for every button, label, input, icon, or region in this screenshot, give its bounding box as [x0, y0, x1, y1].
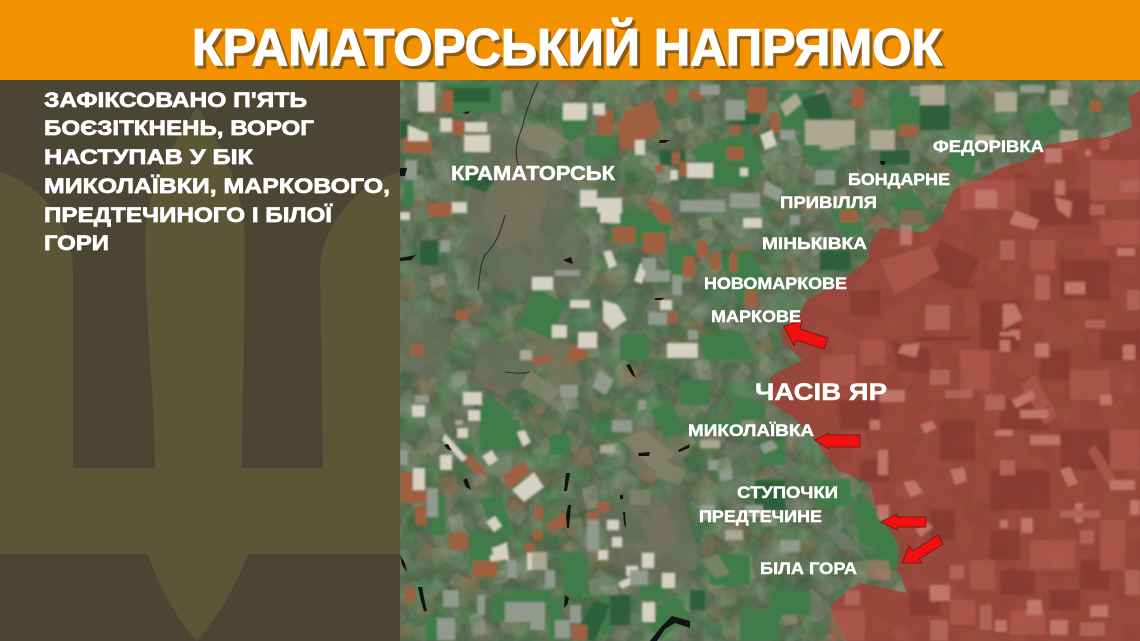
text block: summary [44, 89, 390, 255]
map: occupied territory red zone [770, 90, 1140, 641]
map label: Predtechyne: ПРЕДТЕЧИНЕ [699, 507, 822, 526]
text block: summary: ПРЕДТЕЧИНОГО І БІЛОЇ [44, 204, 333, 227]
icon: trident watermark [0, 107, 400, 641]
map: rivers and water bodies [400, 82, 886, 641]
panel: left text panel [0, 80, 400, 641]
arrow: towards Bila Hora [902, 535, 943, 563]
title: КРАМАТОРСЬКИЙ НАПРЯМОК [195, 21, 945, 80]
map label: Novomarkove: НОВОМАРКОВЕ [704, 274, 847, 293]
text block: summary: МИКОЛАЇВКИ, МАРКОВОГО, [44, 175, 390, 198]
map label: Stupochky: СТУПОЧКИ [737, 483, 838, 502]
map label: Fedorivka: ФЕДОРІВКА [933, 137, 1044, 156]
text block: summary: ЗАФІКСОВАНО П'ЯТЬ [44, 89, 307, 112]
map: red zone fields [820, 148, 1140, 641]
map label: Chasiv Yar: ЧАСІВ ЯР [755, 379, 887, 406]
map label: Minkivka: МІНЬКІВКА [762, 234, 867, 253]
map label: Mykolaivka: МИКОЛАЇВКА [688, 421, 814, 440]
panel: satellite map [400, 80, 1140, 641]
map label: Kramatorsk: КРАМАТОРСЬК [451, 163, 616, 185]
map: remaining green pocket by the front line [826, 492, 899, 567]
arrow: towards Mykolaivka [815, 433, 860, 449]
map label: Markove: МАРКОВЕ [711, 307, 801, 326]
map: dense field texture [400, 80, 1140, 641]
text block: summary: НАСТУПАВ У БІК [44, 146, 253, 169]
map label: Pryvillia: ПРИВІЛЛЯ [780, 193, 877, 212]
text block: summary: БОЄЗІТКНЕНЬ, ВОРОГ [44, 117, 314, 140]
map label: Bila Hora: БІЛА ГОРА [760, 559, 857, 578]
map: satellite field mosaic [400, 82, 1110, 641]
arrow: towards Predtechyne [881, 514, 926, 530]
title: КРАМАТОРСЬКИЙ НАПРЯМОК [192, 18, 942, 77]
text block: summary: ГОРИ [44, 232, 109, 255]
map label: Bondarne: БОНДАРНЕ [848, 170, 950, 189]
arrow: towards Markove [784, 321, 828, 349]
header band [0, 0, 1140, 80]
